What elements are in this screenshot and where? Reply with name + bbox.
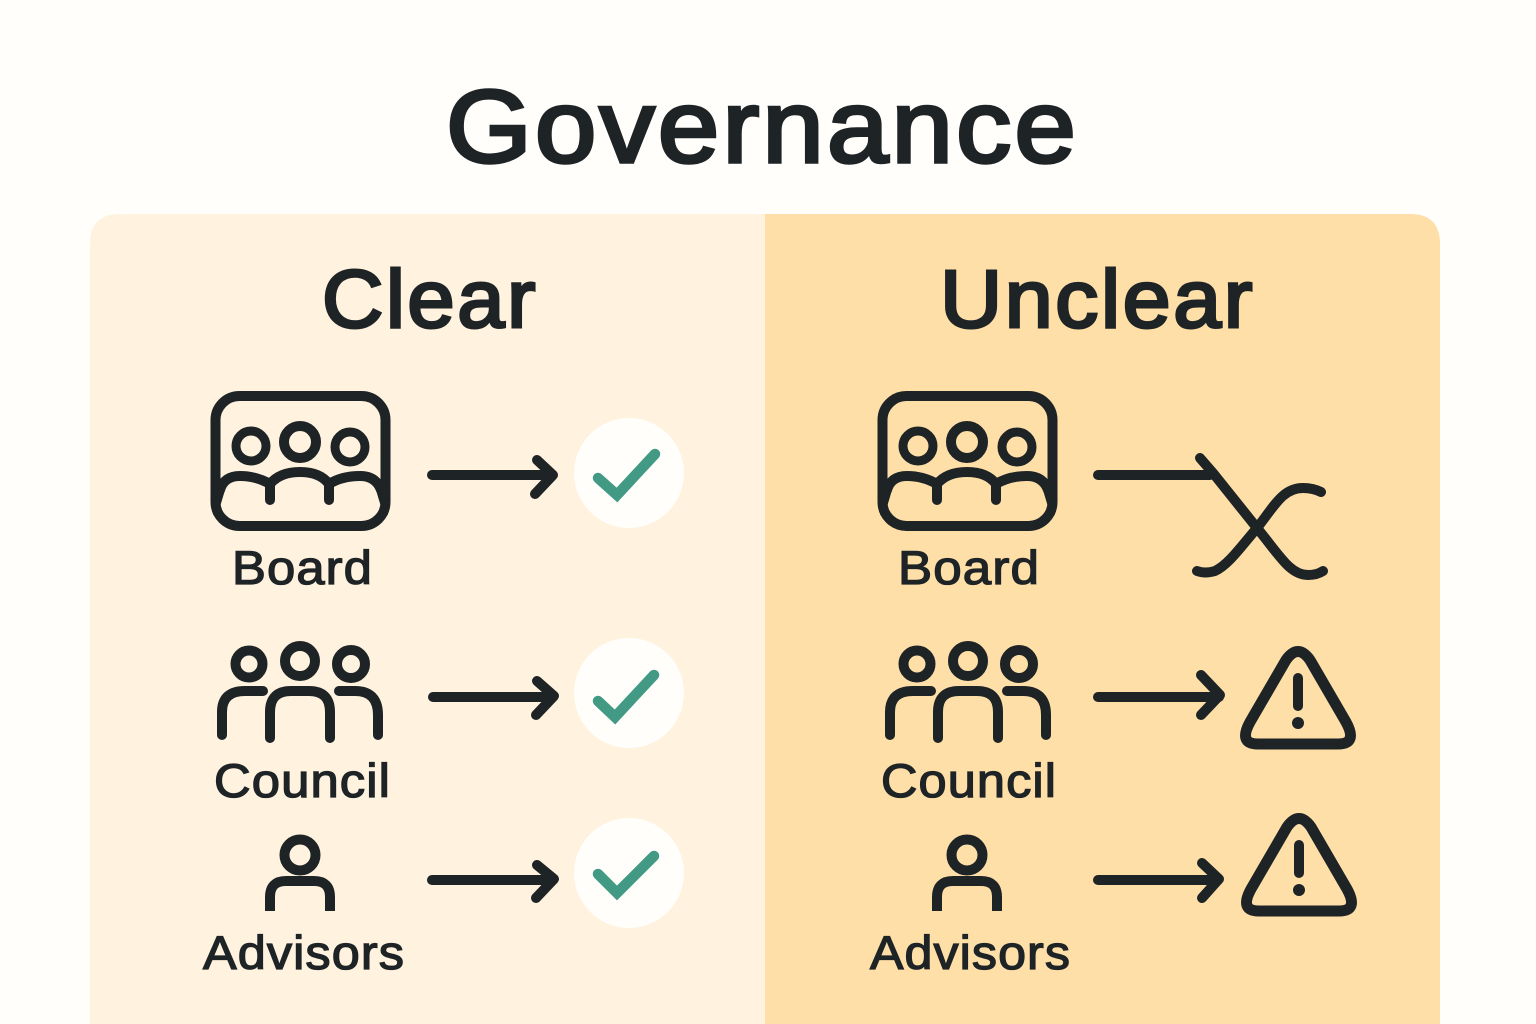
status: council check [574, 638, 684, 748]
label: council: Council [881, 754, 1057, 807]
label: council: Council [214, 754, 391, 807]
arrow: board [432, 460, 553, 494]
icon: board [214, 396, 387, 526]
icon: warning [1246, 818, 1352, 911]
icon: advisors [270, 840, 330, 911]
icon: warning [1246, 652, 1350, 744]
label: board: Board [898, 541, 1040, 594]
arrow: council [433, 681, 554, 715]
status: board check [574, 418, 684, 528]
label: board: Board [232, 541, 373, 594]
heading: unclear: Unclear [940, 254, 1255, 345]
arrow: advisors [432, 865, 554, 898]
arrow: council [1098, 675, 1220, 715]
label: advisors: Advisors [870, 926, 1071, 979]
heading: clear: Clear [322, 254, 538, 345]
icon: advisors [937, 840, 997, 911]
icon: council [222, 646, 378, 738]
icon: board [881, 396, 1054, 526]
panel: unclear [765, 214, 1440, 1024]
icon: council [890, 646, 1046, 738]
label: advisors: Advisors [203, 926, 405, 979]
status: advisors check [574, 818, 684, 928]
arrow: advisors [1098, 863, 1219, 898]
title: Governance [446, 69, 1079, 184]
panel: clear [90, 214, 765, 1024]
arrow: crossed paths [1098, 458, 1323, 575]
